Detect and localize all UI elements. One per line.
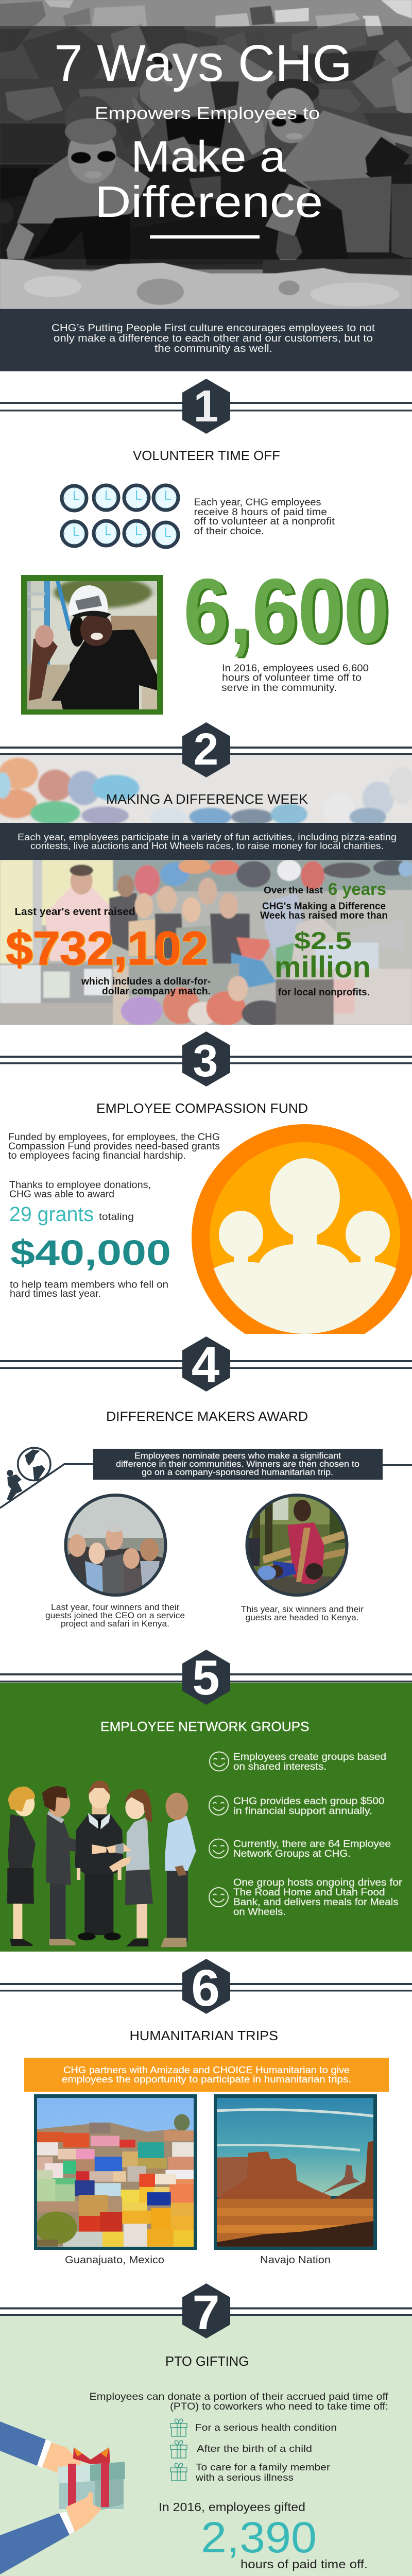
callout: last six years: CHG's Making a Difference: [262, 901, 386, 912]
callout: last six years: $2.5: [294, 927, 352, 954]
text: help team members: hard times last year.: [10, 1289, 101, 1299]
banner: humanitarian partners: employees the opportunity to participate in humanitarian trips.: [62, 2074, 351, 2084]
list: network group facts: CHG provides each group $500: [233, 1796, 384, 1807]
text: help team members: to help team members who fell on: [10, 1280, 168, 1290]
heading: difference makers award: DIFFERENCE MAKERS AWARD: [106, 1409, 308, 1424]
hero title: Make a: [131, 132, 286, 181]
hero dark overlay band: [0, 26, 412, 259]
hero photo: volunteers in trench: [0, 0, 412, 309]
panel: PTO gifting background: [0, 2316, 412, 2576]
section 1 marker: 1: [194, 381, 218, 431]
hero title: 7 Ways CHG: [54, 35, 352, 92]
text: compassion fund description: to employees facing financial hardship.: [8, 1150, 186, 1161]
text: eight hours: [194, 497, 335, 537]
stat: grants and total: [9, 1203, 171, 1273]
text: compassion fund description: Thanks to employee donations,: [9, 1180, 151, 1191]
photo: last year's winners: [64, 1494, 167, 1597]
hero title: [54, 35, 352, 239]
woman with crossed arms: [7, 1787, 36, 1946]
faded balloon background: [0, 755, 412, 826]
text: compassion fund description: Compassion Fund provides need-based grants: [8, 1141, 220, 1152]
heading: PTO gifting: PTO GIFTING: [165, 2353, 249, 2369]
section 4 marker: 4: [192, 1336, 219, 1393]
banner: humanitarian partners: CHG partners with Amizade and CHOICE Humanitarian to give: [63, 2064, 350, 2075]
woman in grey blouse: [107, 1789, 153, 1946]
banner: nomination description: go on a company-sponsored humanitarian trip.: [142, 1467, 333, 1477]
stat: hours gifted: hours of paid time off.: [241, 2557, 368, 2571]
heading: volunteer time off: VOLUNTEER TIME OFF: [133, 448, 280, 463]
section 2 marker: 2: [194, 724, 218, 774]
caption: last year's trip: project and safari in Kenya.: [61, 1619, 169, 1629]
text: compassion fund description: CHG was able to award: [9, 1189, 114, 1200]
text: hours used: serve in the community.: [221, 683, 337, 693]
text: eight hours: of their choice.: [194, 526, 264, 537]
callout: last six years: 6 years: [328, 879, 386, 899]
list: network group facts: One group hosts ongoing drives for: [233, 1877, 403, 1888]
photo: Navajo Nation mesa: [214, 2094, 377, 2250]
section 4 marker: [0, 1336, 412, 1393]
icon grid: eight clocks: [62, 485, 178, 547]
callout: last six years: million: [274, 951, 371, 984]
banner: nomination description: Employees nominate peers who make a significant: [134, 1451, 341, 1461]
heading: humanitarian trips: HUMANITARIAN TRIPS: [130, 2028, 278, 2043]
text: hours used: [221, 663, 369, 693]
list: network group facts: [209, 1752, 403, 1918]
list: network group facts: Employees create groups based: [233, 1752, 386, 1762]
stat: hours gifted: 2,390: [201, 2513, 317, 2562]
caption: this year's trip: [241, 1604, 364, 1622]
stat: grants and total: $40,000: [10, 1233, 171, 1273]
caption: last year's trip: [45, 1602, 185, 1629]
text: eight hours: off to volunteer at a nonprofit: [194, 516, 335, 527]
section 3 marker: [0, 1031, 412, 1087]
list: network group facts: Bank, and delivers meals for Meals: [233, 1897, 399, 1908]
hero title: Empowers Employees to: [95, 104, 320, 123]
list: network group facts: The Road Home and Utah Food: [233, 1887, 385, 1898]
banner: nomination description: [93, 1449, 412, 1480]
list: reasons for PTO gifting: For a serious health condition: [195, 2422, 337, 2433]
callout: last six years: for local nonprofits.: [278, 987, 370, 998]
caption: Navajo Nation: Navajo Nation: [260, 2255, 331, 2266]
list: reasons for PTO gifting: After the birth of a child: [197, 2443, 312, 2454]
stat: hours gifted: [159, 2500, 368, 2571]
text: help team members: [10, 1280, 168, 1299]
section 7 marker: 7: [193, 2285, 219, 2340]
stat: hours gifted: In 2016, employees gifted: [159, 2500, 305, 2514]
section 6 marker: [0, 1959, 412, 2017]
band: week description: [0, 823, 412, 860]
photo: volunteer in hard hat: [21, 575, 163, 715]
intro band: [0, 309, 412, 371]
section 7 marker: [0, 2283, 412, 2340]
callout: last six years: Over the last: [264, 885, 323, 895]
band: week description: contests, live auctions and Hot Wheels races, to raise money for local charities.: [30, 840, 384, 851]
illustration: five business people: [7, 1781, 196, 1947]
text: hours used: In 2016, employees used 6,600: [222, 663, 369, 674]
callout: last year's event: which includes a dollar-for-: [81, 976, 211, 987]
list: network group facts: Currently, there are 64 Employee: [233, 1839, 391, 1850]
section 2 marker: [0, 722, 412, 777]
big number 6,600: 6,600: [183, 560, 389, 662]
list: network group facts: on Wheels.: [233, 1907, 286, 1918]
callout: last six years: Week has raised more than: [260, 910, 388, 921]
callout: last six years: [260, 879, 388, 998]
text: hours used: hours of volunteer time off to: [222, 673, 362, 683]
list: reasons for PTO gifting: [170, 2419, 337, 2483]
text: eight hours: receive 8 hours of paid time: [194, 507, 327, 518]
section 1 marker: [0, 379, 412, 434]
panel: employee network groups background: [0, 1683, 412, 1952]
illustration: hands exchanging gift: [0, 2421, 125, 2574]
stat: grants and total: 29 grants: [9, 1203, 94, 1226]
section 5 marker: [0, 1650, 412, 1705]
man in black suit: [75, 1781, 124, 1940]
man in blue shirt: [161, 1793, 196, 1947]
text: PTO donation description: (PTO) to coworkers who need to take time off:: [170, 2401, 388, 2412]
callout: last year's event: Last year's event raised: [14, 906, 135, 918]
photo: Guanajuato hillside houses: [34, 2094, 197, 2250]
list: reasons for PTO gifting: To care for a family member: [196, 2462, 330, 2472]
list: reasons for PTO gifting: with a serious illness: [195, 2472, 294, 2483]
handshake: [92, 1844, 107, 1854]
callout: last year's event: $732,102: [7, 923, 209, 975]
text: PTO donation description: Employees can donate a portion of their accrued paid time off: [90, 2392, 389, 2402]
callout: last year's event: dollar company match.: [102, 986, 211, 997]
caption: this year's trip: guests are headed to Kenya.: [245, 1613, 358, 1622]
icon: figure pushing globe uphill: [0, 1448, 95, 1508]
caption: last year's trip: Last year, four winners and their: [51, 1602, 180, 1612]
list: network group facts: in financial support annually.: [233, 1806, 372, 1817]
photo: this year's winners: [245, 1494, 349, 1597]
heading: employee compassion fund: EMPLOYEE COMPASSION FUND: [96, 1100, 308, 1116]
intro band: CHG’s Putting People First culture encourages employees to not: [52, 323, 375, 334]
text: PTO donation description: [90, 2392, 389, 2412]
hero title: Difference: [95, 178, 323, 227]
text: compassion fund description: [8, 1132, 220, 1200]
caption: Guanajuato: Guanajuato, Mexico: [65, 2255, 164, 2266]
photo: employees with balloons: [0, 859, 412, 1027]
section 5 marker: 5: [192, 1650, 220, 1705]
band: week description: Each year, employees participate in a variety of fun activities, including pizza-eating: [18, 832, 397, 842]
callout: last year's event: [6, 906, 211, 997]
section 3 marker: 3: [193, 1035, 218, 1086]
banner: nomination description: difference in their communities. Winners are then chosen to: [116, 1459, 359, 1469]
big number 6,600: 6,600: [186, 561, 392, 664]
caption: last year's trip: guests joined the CEO on a service: [45, 1611, 185, 1620]
heading: employee network groups: EMPLOYEE NETWORK GROUPS: [100, 1719, 309, 1734]
stat: grants and total: totaling: [99, 1212, 134, 1223]
heading: making a difference week: MAKING A DIFFERENCE WEEK: [106, 791, 308, 807]
icon: group of people in orange circle: [192, 1124, 412, 1351]
intro band: only make a difference to each other and our customers, but to: [54, 333, 373, 344]
banner: humanitarian partners: [24, 2058, 389, 2092]
text: eight hours: Each year, CHG employees: [194, 497, 321, 508]
list: network group facts: on shared interests.: [233, 1761, 327, 1772]
caption: this year's trip: This year, six winners and their: [241, 1604, 364, 1614]
section 6 marker: 6: [191, 1959, 220, 2017]
callout: last year's event: $732,102: [6, 922, 208, 975]
man in grey suit: [42, 1786, 92, 1945]
intro band: the community as well.: [154, 343, 272, 354]
text: compassion fund description: Funded by employees, for employees, the CHG: [8, 1132, 220, 1143]
list: network group facts: Network Groups at CHG.: [233, 1849, 351, 1859]
